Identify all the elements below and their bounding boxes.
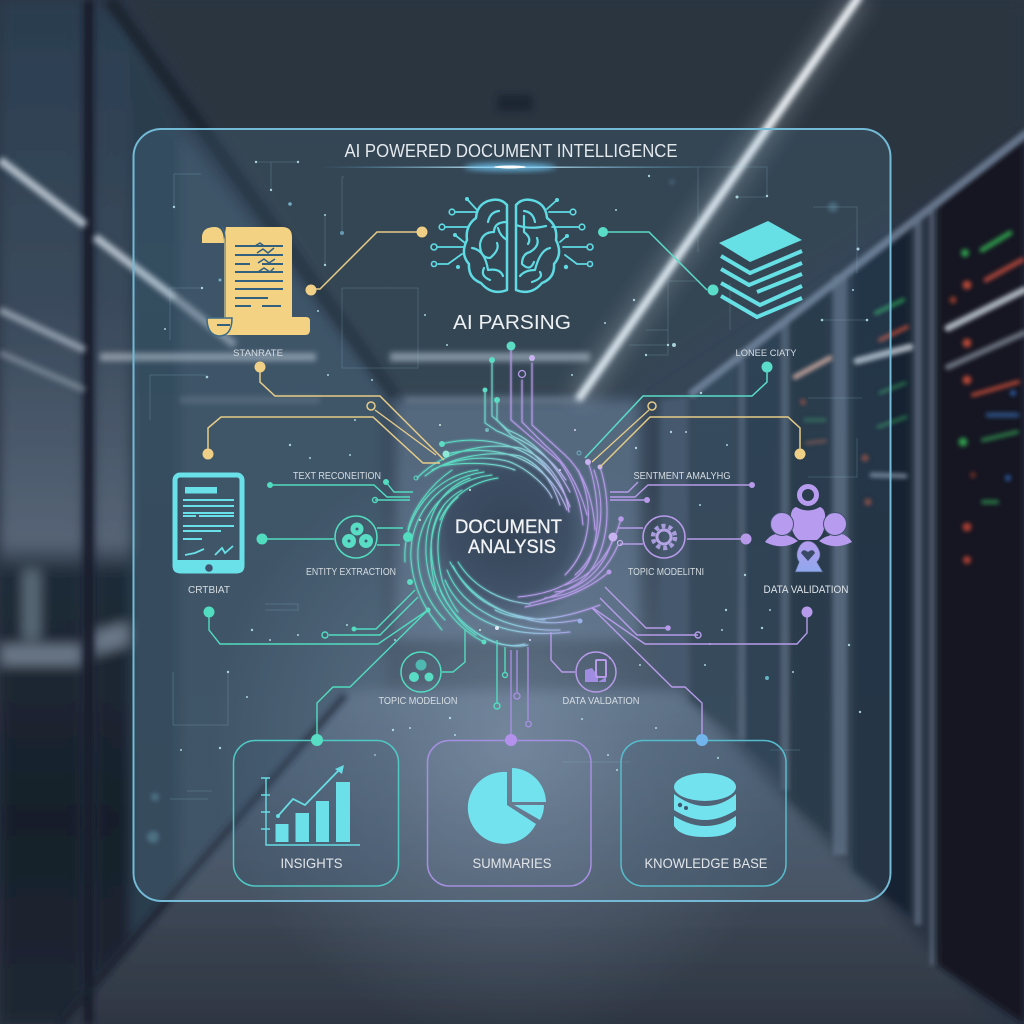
icon: layers stack [719, 221, 802, 317]
data validation node, bottom [551, 632, 616, 692]
heading: document analysis: ANALYSIS [468, 536, 556, 558]
label: entity extraction: ENTITY EXTRACTION [306, 567, 396, 578]
label: data validation right: DATA VALIDATION [764, 584, 849, 596]
label: tablet: CRTBIAT [188, 584, 231, 596]
panel: summaries [428, 734, 591, 886]
swirl right arcs [511, 350, 621, 607]
ceiling lights [0, 0, 860, 400]
connector group: gold upper left [202, 362, 444, 463]
label: knowledge base: KNOWLEDGE BASE [644, 855, 768, 871]
connector: scroll to brain [306, 226, 428, 296]
panel: insights [234, 734, 398, 886]
label: insights: INSIGHTS [280, 855, 342, 871]
label: layers: LONEE CIATY [736, 348, 797, 359]
entity extraction node [256, 516, 413, 558]
connectors: sentiment analysis [610, 482, 755, 503]
heading: document analysis [455, 516, 562, 558]
label: sentiment analysis: SENTMENT AMALYHG [634, 471, 731, 482]
connectors: text recognition [267, 479, 413, 502]
window frames [60, 0, 395, 1024]
heading: AI Parsing: AI PARSING [453, 312, 571, 334]
icon: tablet [173, 475, 244, 573]
swirl upper arcs [417, 360, 570, 512]
label: summaries: SUMMARIES [472, 855, 552, 871]
swirl bottom arcs [440, 562, 600, 646]
swirl left arcs [405, 470, 498, 642]
topic modeling node, right with gear [608, 516, 752, 558]
connector group: teal and gold upper right [585, 362, 806, 467]
icon: database [674, 773, 736, 837]
connectors: lower left [204, 590, 428, 740]
topic modeling node, lower left [401, 630, 465, 692]
right server racks [660, 132, 1024, 1024]
panel: knowledge base [621, 734, 786, 886]
vertical connectors from swirl to lower boxes [494, 640, 531, 740]
title: AI POWERED DOCUMENT INTELLIGENCE [344, 140, 678, 161]
swirl nodes [407, 424, 612, 644]
connector: brain to layers [598, 227, 718, 296]
label: data validation bottom: DATA VALDATION [562, 696, 640, 707]
heading: document analysis: DOCUMENT [455, 516, 562, 538]
connectors: lower right [592, 587, 812, 740]
glass panel [134, 129, 890, 901]
title glow underline [320, 163, 700, 171]
central swirl: document analysis [405, 350, 621, 646]
faint schematic lines and particles [147, 161, 868, 843]
label: text recognition: TEXT RECONEITION [293, 471, 381, 482]
icon: AI brain with circuit branches [431, 197, 593, 292]
top node dots [482, 342, 535, 403]
label: topic modeling left: TOPIC MODELION [378, 696, 458, 707]
label: scroll: STANRATE [233, 348, 283, 359]
chart: rising bars [261, 765, 360, 845]
chart: pie [468, 768, 546, 844]
icon: people with heart [765, 486, 852, 572]
label: topic modeling right: TOPIC MODELITNI [628, 567, 704, 578]
icon: scroll document [202, 227, 310, 336]
